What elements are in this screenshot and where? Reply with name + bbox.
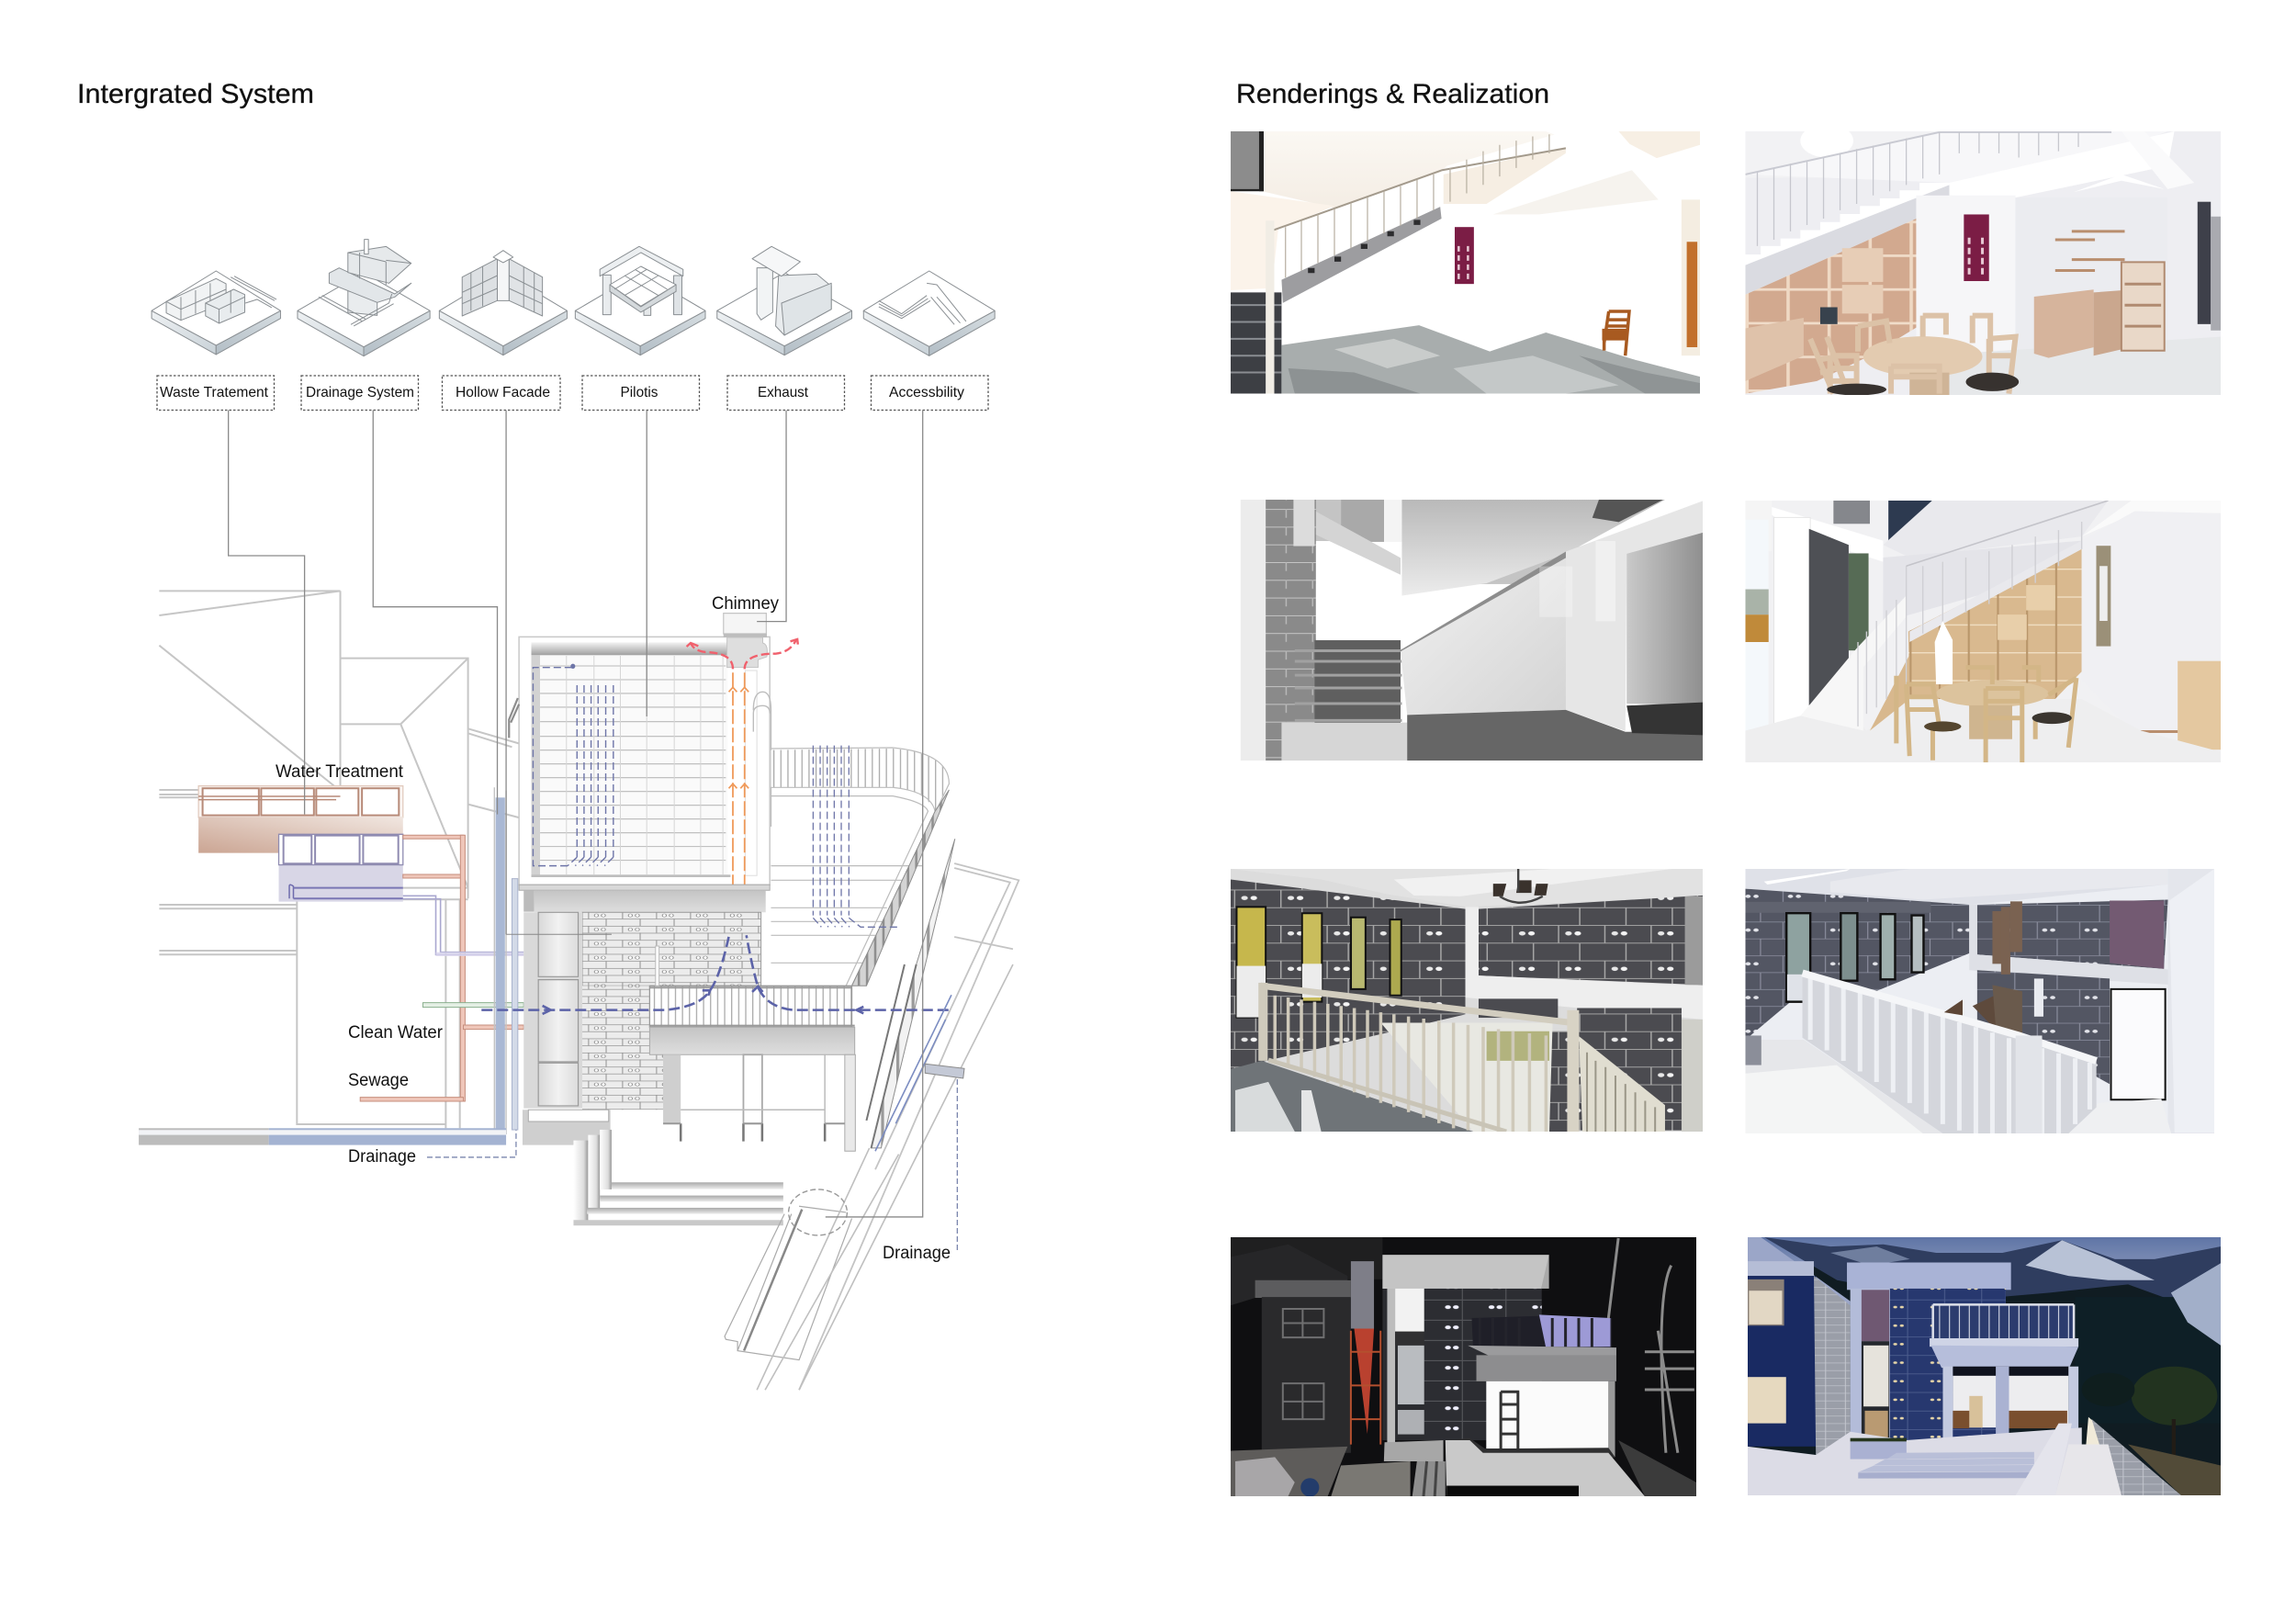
- label text: Hollow Facade: Hollow Facade: [456, 385, 550, 400]
- label boxes: [157, 376, 988, 410]
- icon: hollow facade: [439, 251, 567, 355]
- photo 2: rendered interior with wood shelving: [1745, 131, 2221, 395]
- icon: accessibility: [863, 271, 995, 355]
- label text: Accessbility: Accessbility: [889, 385, 964, 400]
- ramp: [725, 964, 1013, 1390]
- icon: drainage system: [298, 240, 430, 356]
- photo 5: realized upper void with hollow brick walls: [1231, 869, 1703, 1132]
- icon: exhaust: [717, 246, 852, 355]
- air flow arrows: orange: [729, 669, 748, 907]
- photo 3: realized stair, monochrome: [1241, 500, 1703, 761]
- callout: Clean Water: Clean Water: [348, 1023, 444, 1043]
- balcony: [649, 946, 855, 1054]
- leader line: hollow facade end: [506, 933, 612, 935]
- label box: Drainage System: [301, 376, 419, 410]
- icon: pilotis: [575, 246, 705, 355]
- photo 8: rendered house at dusk: [1748, 1237, 2221, 1495]
- ventilation flow arrows: blue: [481, 935, 949, 1014]
- label box: Exhaust: [727, 376, 845, 410]
- label box: Accessbility: [871, 376, 988, 410]
- drain spout: [925, 1064, 964, 1078]
- water treatment tank: sewage: [198, 786, 403, 853]
- callout: Chimney: Chimney: [712, 594, 779, 614]
- rain pattern dashes: upper wall: [533, 668, 613, 866]
- pipe: green supply: [422, 1003, 523, 1008]
- chimney: [724, 614, 767, 668]
- photo 4: rendered stair with wood shelving: [1745, 501, 2221, 762]
- blue drainage line along terrace: [875, 995, 951, 1151]
- rain pattern dashes: terrace: [813, 746, 899, 927]
- label text: Exhaust: Exhaust: [758, 385, 809, 400]
- hollow brick facade: [582, 912, 761, 986]
- pipe: drainage (blue): [139, 787, 518, 1145]
- entrance plinth: [523, 1110, 611, 1145]
- pipe: sewage (red): [360, 835, 523, 1101]
- photo 7: realized house at night: [1231, 1237, 1696, 1496]
- label text: Drainage System: Drainage System: [306, 385, 414, 400]
- callout: Drainage right: Drainage: [883, 1244, 951, 1263]
- neighbouring building outline: [159, 591, 521, 1128]
- drainage dashed leader left: [427, 1130, 516, 1157]
- leader lines: [229, 411, 923, 1217]
- photo 6: rendered upper void: [1745, 869, 2214, 1133]
- water treatment tank: clean water: [279, 834, 403, 902]
- label text: Pilotis: Pilotis: [621, 385, 658, 400]
- integrated system section drawing: [139, 411, 1019, 1390]
- photo 1: realized interior with stair and poster: [1231, 131, 1700, 393]
- label text: Waste Tratement: Waste Tratement: [160, 385, 269, 400]
- pipe: clean water (purple): [403, 896, 523, 954]
- entrance steps: [573, 1130, 783, 1225]
- callout: Sewage: Sewage: [348, 1071, 409, 1090]
- callout: Drainage left: Drainage: [348, 1147, 416, 1167]
- window column: [523, 912, 582, 1109]
- exhaust arrows: red air flow: [687, 639, 798, 669]
- accessibility detail circle: [789, 1189, 847, 1235]
- title: Renderings and Realization: Renderings & Realization: [1236, 79, 1549, 109]
- deck: upper rail and terrace: [771, 748, 1019, 1390]
- icon: waste treatment: [152, 271, 280, 355]
- callout: Water Treatment: Water Treatment: [276, 762, 404, 782]
- label box: Hollow Facade: [443, 376, 560, 410]
- icon row: six isometric system diagrams: [152, 240, 995, 356]
- label box: Waste Tratement: [157, 376, 274, 410]
- drainage dashed leader right: [956, 1079, 958, 1251]
- label box: Pilotis: [582, 376, 700, 410]
- slab between storeys: [519, 885, 770, 912]
- lower brick facade: [582, 986, 664, 1110]
- upper storey wall with grid: [509, 637, 771, 885]
- rain water inlet dot: [570, 664, 575, 669]
- pilotis columns and floor below balcony: [427, 964, 1013, 1390]
- title: Intergrated System: Intergrated System: [77, 79, 314, 109]
